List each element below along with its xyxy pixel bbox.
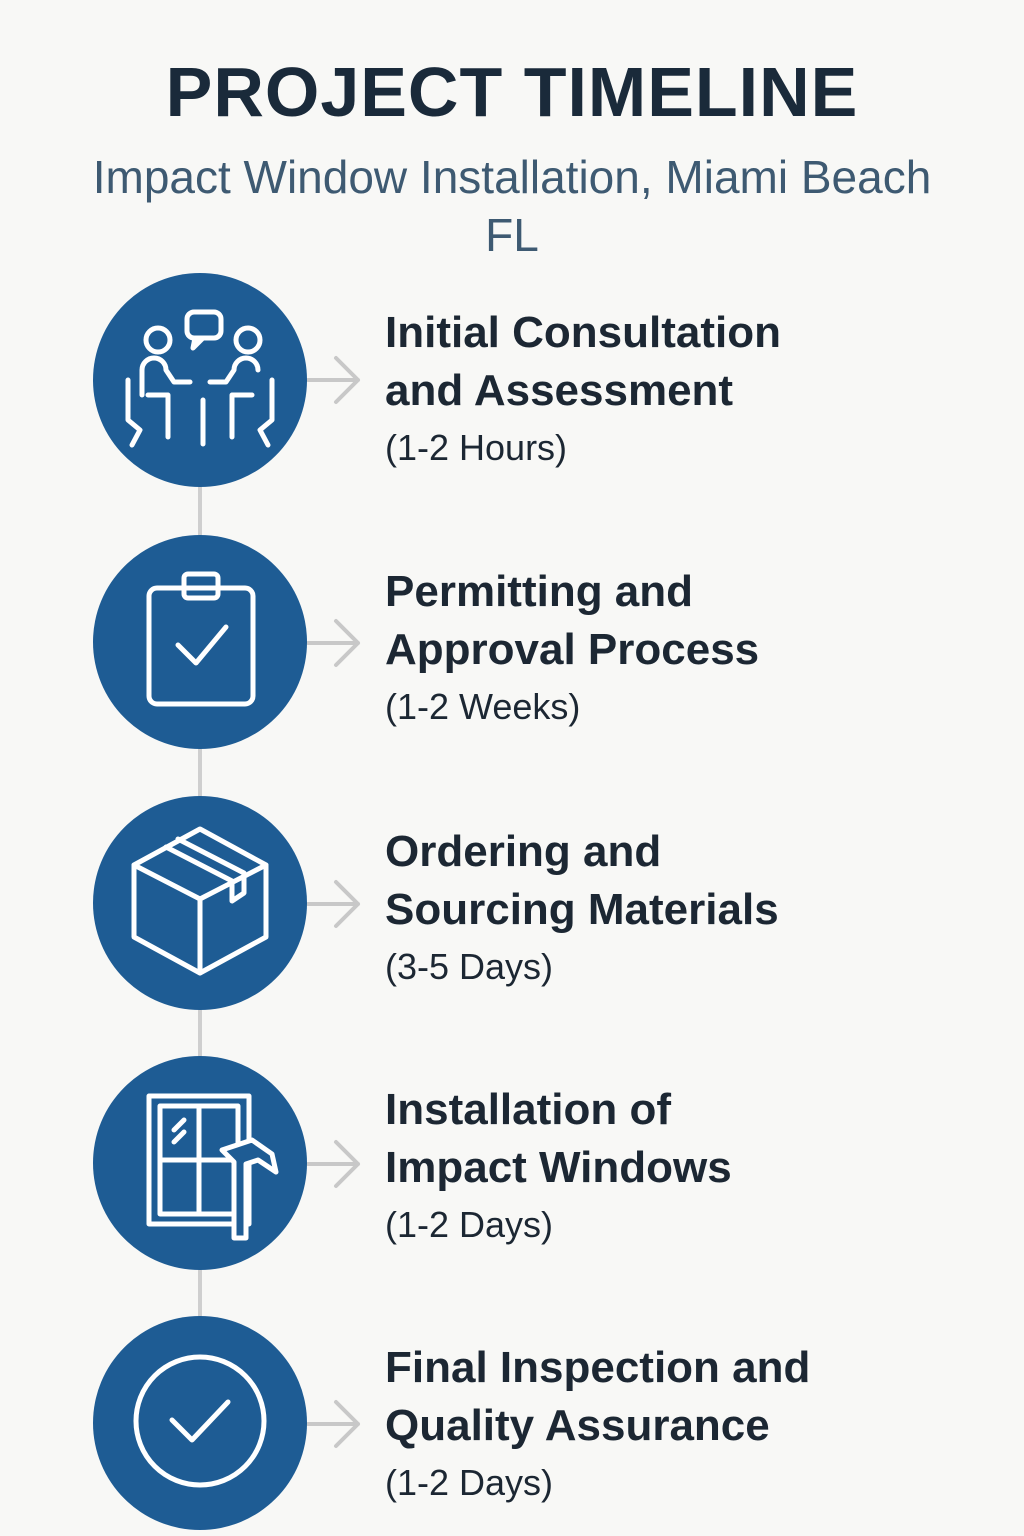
step 1 text: (1-2 Hours): [385, 427, 567, 468]
arrows: [308, 358, 358, 1446]
subtitle: [93, 151, 931, 261]
step 2 text: Approval Process: [385, 625, 759, 674]
subtitle: Impact Window Installation, Miami Beach: [93, 151, 931, 203]
step 2 text: [385, 567, 759, 727]
step 4 text: Impact Windows: [385, 1143, 732, 1192]
step 5 text: (1-2 Days): [385, 1462, 553, 1503]
step 2 text: Permitting and: [385, 567, 693, 616]
step 5 text: Final Inspection and: [385, 1343, 810, 1392]
icon: consultation: [93, 273, 307, 487]
step 1 text: and Assessment: [385, 366, 733, 415]
icon: window with hammer: [93, 1056, 307, 1270]
step 3 text: Sourcing Materials: [385, 885, 779, 934]
step 3 text: (3-5 Days): [385, 946, 553, 987]
icon: clipboard: [93, 535, 307, 749]
step 4 text: [385, 1085, 732, 1245]
icon: check circle: [93, 1316, 307, 1530]
step 5 text: [385, 1343, 810, 1503]
step 4 text: Installation of: [385, 1085, 671, 1134]
step 3 text: [385, 827, 779, 987]
step 3 text: Ordering and: [385, 827, 661, 876]
step 1 text: [385, 308, 781, 468]
title: PROJECT TIMELINE: [166, 53, 858, 131]
step 4 text: (1-2 Days): [385, 1204, 553, 1245]
step 2 text: (1-2 Weeks): [385, 686, 580, 727]
step 5 text: Quality Assurance: [385, 1401, 770, 1450]
connector lines: [198, 480, 202, 1320]
step 1 text: Initial Consultation: [385, 308, 781, 357]
icon: box: [93, 796, 307, 1010]
subtitle: FL: [485, 209, 539, 261]
